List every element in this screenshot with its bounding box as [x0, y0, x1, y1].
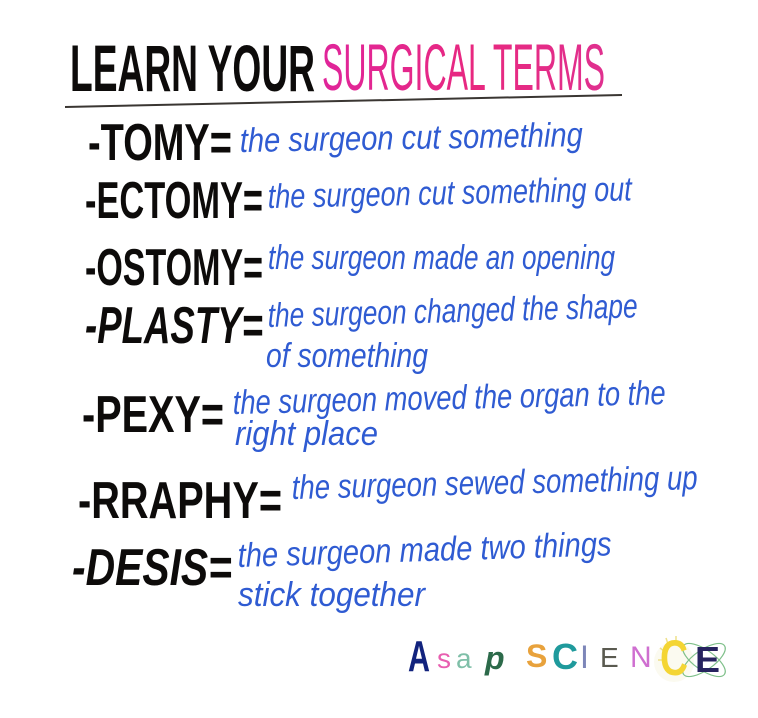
term: pexy: -PEXY= [82, 386, 224, 444]
logo: AsapSCIENCE: I [580, 639, 589, 675]
term: tomy: -TOMY= [88, 114, 232, 172]
logo: AsapSCIENCE: S [526, 638, 547, 674]
logo: AsapSCIENCE: a [456, 643, 472, 674]
logo: AsapSCIENCE: p [484, 640, 505, 676]
term: tomy [88, 114, 583, 172]
term: desis [72, 525, 612, 614]
term: plasty: of something [266, 337, 428, 375]
icon: atom behind E [678, 637, 730, 683]
term: desis: stick together [238, 576, 427, 614]
term: plasty: -PLASTY= [85, 297, 263, 355]
term: desis: the surgeon made two things [237, 525, 612, 575]
term: ostomy: the surgeon made an opening [268, 239, 615, 277]
term: plasty [85, 287, 638, 375]
title underline [65, 95, 622, 107]
logo: AsapSCIENCE [408, 630, 730, 686]
logo: AsapSCIENCE: s [437, 643, 451, 674]
logo: AsapSCIENCE: E [600, 642, 619, 673]
term: pexy [82, 374, 666, 453]
term: ectomy [85, 170, 633, 230]
logo: AsapSCIENCE: C [660, 630, 688, 686]
term: tomy: the surgeon cut something [239, 116, 583, 160]
logo: AsapSCIENCE: E [695, 639, 720, 680]
icon: sun behind C [654, 636, 694, 682]
term: ectomy: -ECTOMY= [85, 172, 263, 230]
term: ostomy [85, 239, 615, 297]
term: rraphy: -RRAPHY= [78, 472, 282, 530]
term: rraphy [78, 459, 698, 530]
term: desis: -DESIS= [72, 539, 232, 597]
term: plasty: the surgeon changed the shape [267, 287, 638, 335]
term: pexy: the surgeon moved the organ to the [232, 374, 666, 422]
term: ectomy: the surgeon cut something out [267, 170, 633, 216]
logo: AsapSCIENCE: A [408, 632, 430, 681]
term: ostomy: -OSTOMY= [85, 239, 263, 297]
logo: AsapSCIENCE: C [552, 636, 578, 677]
term: pexy: right place [235, 415, 378, 453]
title: LEARN YOUR [70, 31, 315, 105]
logo: AsapSCIENCE: N [630, 641, 652, 674]
